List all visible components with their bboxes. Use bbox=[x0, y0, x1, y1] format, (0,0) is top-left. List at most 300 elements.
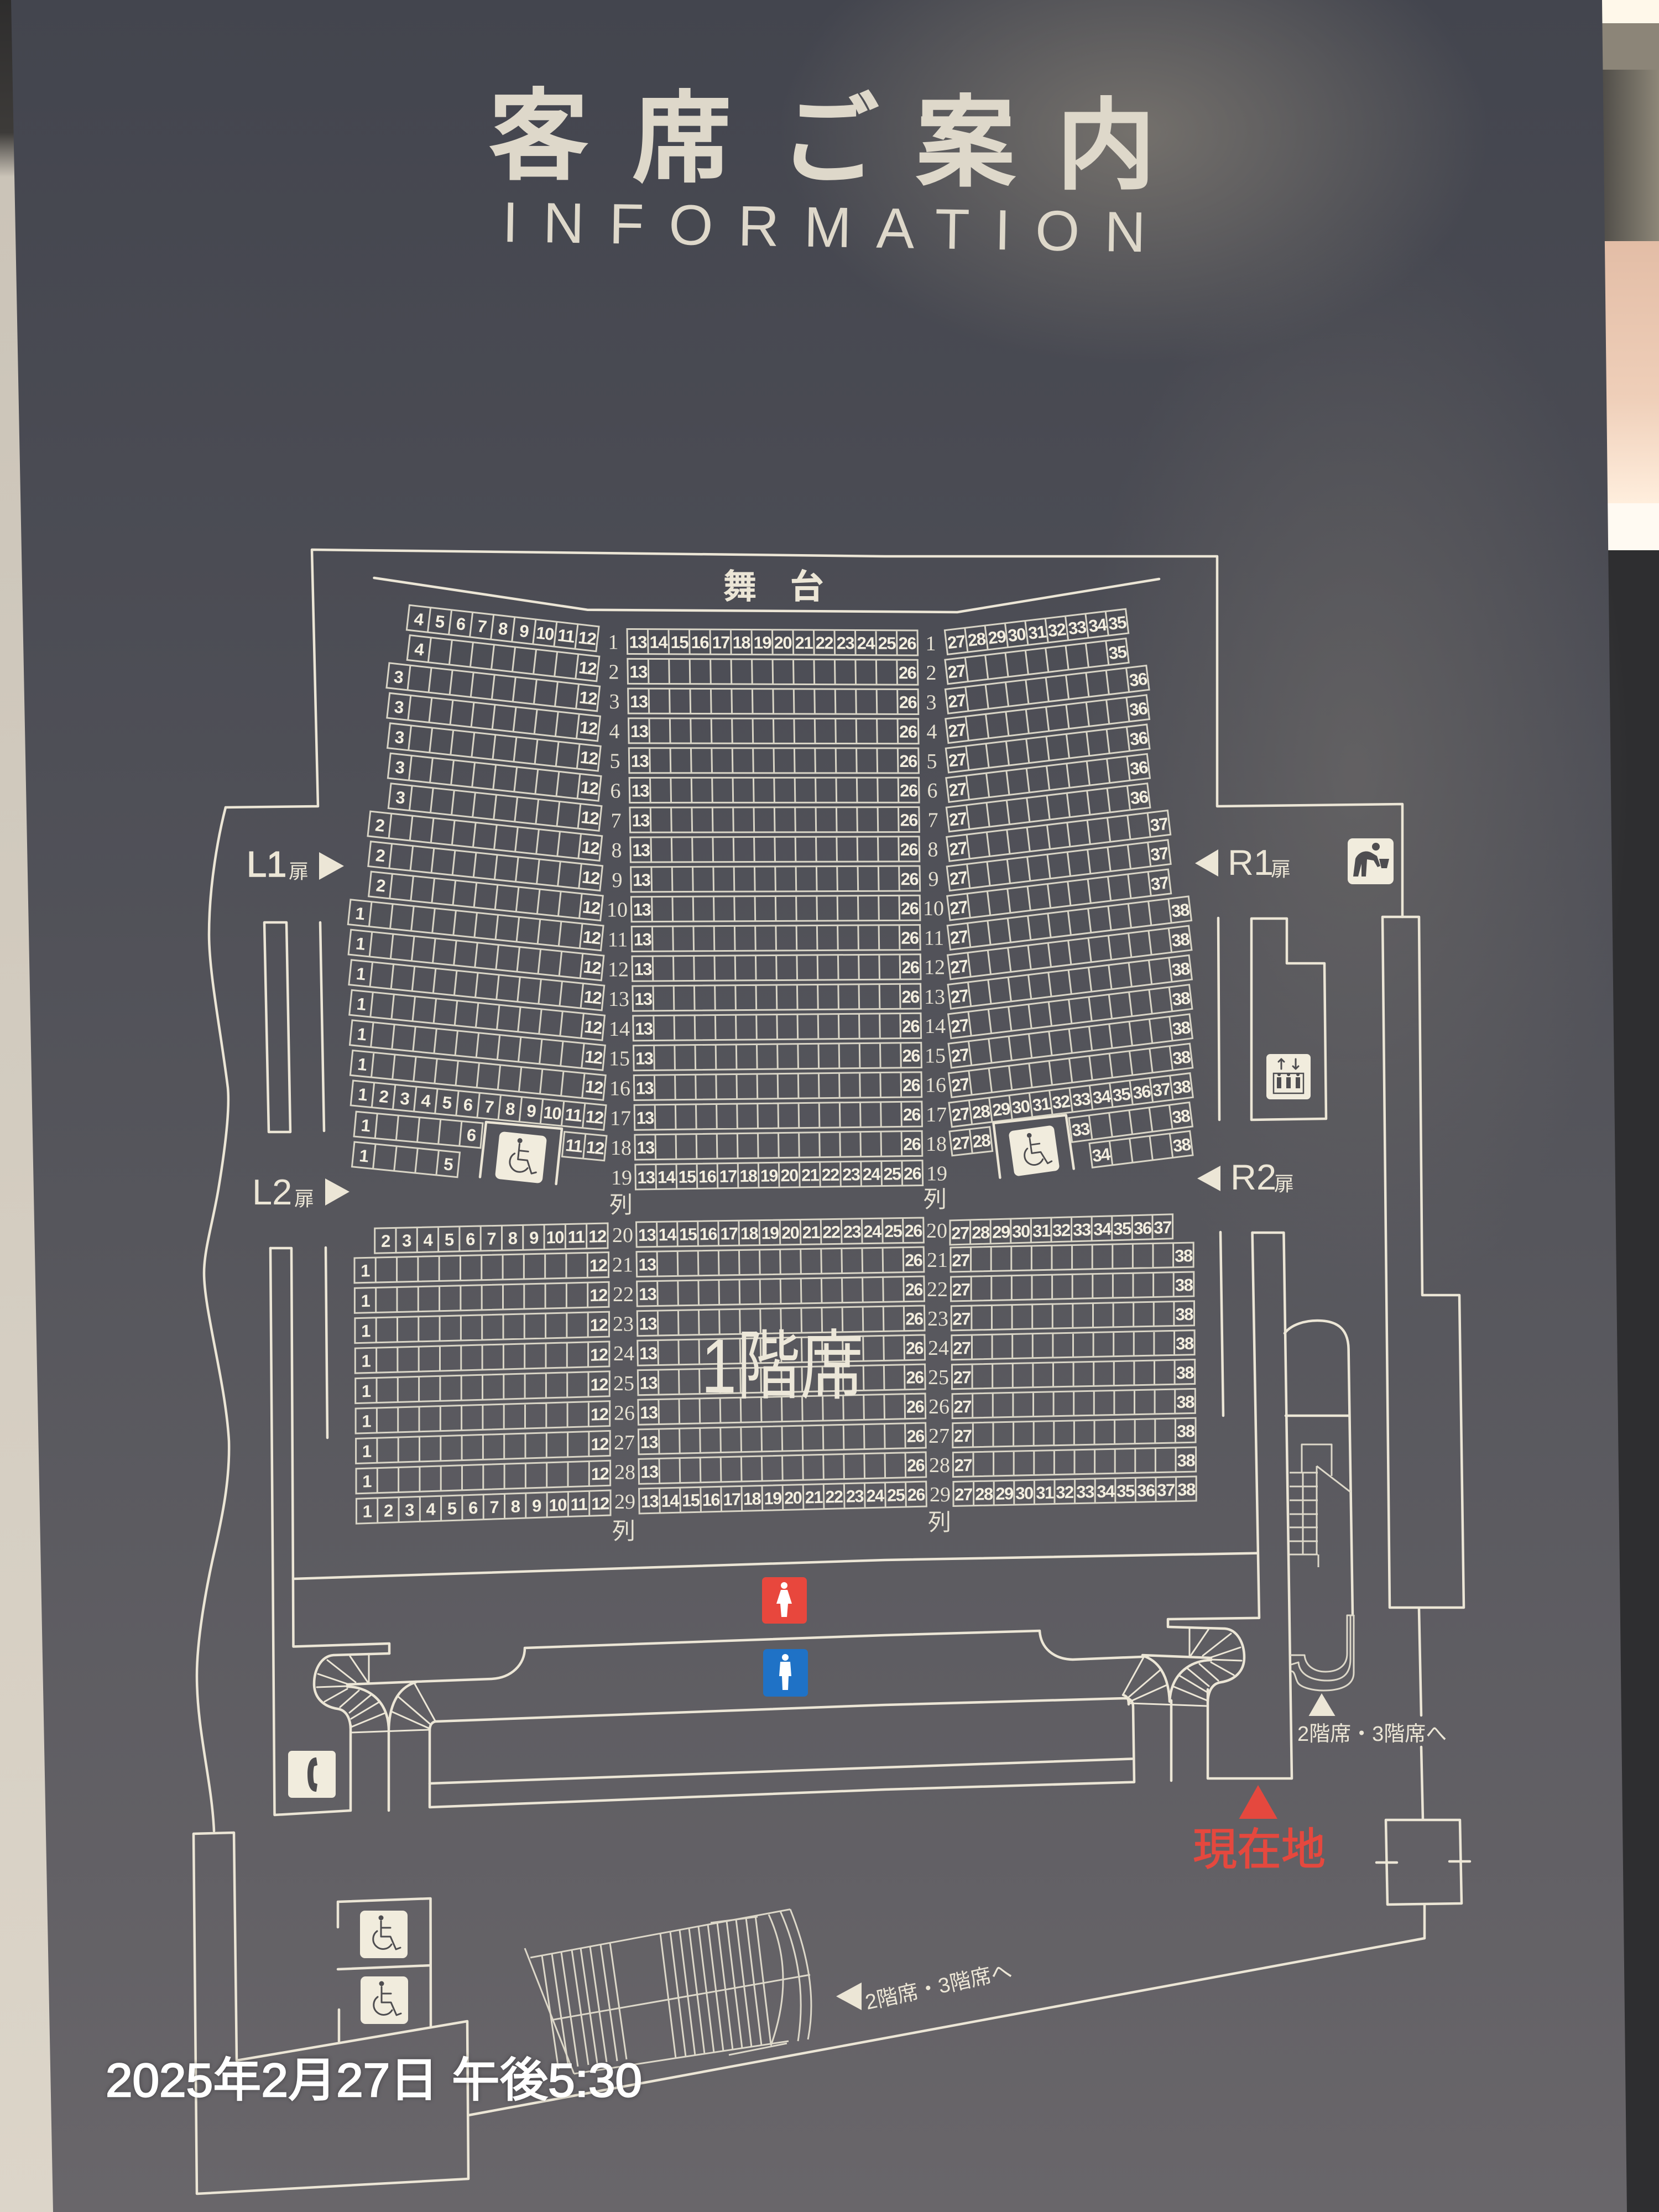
row numbers: right column: 17 bbox=[926, 1103, 947, 1126]
seating block: lower left rows 20-29: 12 bbox=[590, 1315, 607, 1335]
seating block: upper left rows 1-17: 12 bbox=[578, 687, 598, 709]
seating block: upper left rows 1-17: 3 bbox=[394, 757, 406, 778]
seating block: upper right rows 1-17: 27 bbox=[950, 1045, 970, 1066]
row numbers: left column: 3 bbox=[609, 690, 619, 713]
seating block: centre rows 1-29: 26 bbox=[903, 1105, 921, 1124]
seating block: centre rows 1-29: 13 bbox=[630, 692, 648, 711]
row numbers: right column: 列 bbox=[924, 1186, 947, 1212]
seating block: upper left rows 1-17: 10 bbox=[542, 1103, 562, 1124]
seating block: upper right rows 1-17: 38 bbox=[1171, 1106, 1191, 1127]
row numbers: right column: 19 bbox=[926, 1162, 947, 1186]
seating block: lower right rows 20-29: 35 bbox=[1117, 1481, 1135, 1501]
row numbers: left column: 列 bbox=[609, 1192, 633, 1218]
seating block: centre rows 1-29: 13 bbox=[636, 1108, 654, 1128]
seating block: lower left rows 20-29: 12 bbox=[591, 1434, 608, 1454]
seating block: lower left rows 20-29: 5 bbox=[445, 1230, 454, 1249]
door label L1: L1 bbox=[247, 844, 286, 884]
seating block: upper left rows 1-17: 1 bbox=[356, 1024, 367, 1045]
seating block: lower left rows 20-29: 1 bbox=[361, 1291, 371, 1311]
stage label: 舞台 bbox=[723, 568, 824, 606]
seating block: upper left rows 1-17: 6 bbox=[462, 1095, 474, 1115]
seating block: upper left rows 1-17: 12 bbox=[585, 1138, 604, 1159]
seating block: centre rows 1-29: 26 bbox=[901, 869, 919, 889]
seating block: upper right rows 1-17: 27 bbox=[950, 985, 969, 1007]
seating block: upper left rows 1-17: 12 bbox=[578, 717, 598, 739]
seating block: upper right rows 1-17: 32 bbox=[1051, 1092, 1071, 1113]
row numbers: left column: 4 bbox=[609, 720, 619, 743]
seating block: lower left rows 20-29: 7 bbox=[487, 1229, 495, 1249]
seating block: centre rows 1-29: 24 bbox=[866, 1486, 884, 1506]
seating block: lower right rows 20-29: 35 bbox=[1113, 1219, 1131, 1239]
seating block: centre rows 1-29: 18 bbox=[740, 1223, 759, 1243]
row numbers: right column: 8 bbox=[928, 838, 938, 862]
seating block: upper left rows 1-17: 12 bbox=[585, 1107, 604, 1128]
seating block: upper right rows 1-17: 27 bbox=[946, 632, 966, 653]
seating block: lower left rows 20-29: 1 bbox=[362, 1442, 372, 1461]
seating block: upper left rows 1-17: 12 bbox=[582, 927, 601, 948]
seating block: upper right rows 1-17: 33 bbox=[1071, 1119, 1091, 1140]
seating block: upper left rows 1-17: 12 bbox=[581, 837, 600, 858]
seating block: lower right rows 20-29: 27 bbox=[953, 1309, 970, 1329]
right spiral staircase bbox=[1123, 1627, 1244, 1706]
seating block: upper left rows 1-17: 4 bbox=[420, 1091, 432, 1111]
seating block: upper right rows 1-17: 27 bbox=[948, 779, 967, 800]
seating block: centre rows 1-29: 17 bbox=[712, 633, 730, 652]
seating block: centre rows 1-29: 21 bbox=[805, 1488, 823, 1507]
seating block: upper right rows 1-17: 34 bbox=[1088, 614, 1108, 636]
background: left marble wall bbox=[0, 0, 72, 2212]
seating block: lower right rows 20-29: 27 bbox=[952, 1280, 970, 1300]
seating block: centre rows 1-29: 26 bbox=[898, 634, 917, 653]
seating block: lower left rows 20-29: 1 bbox=[362, 1411, 371, 1431]
seating block: lower right rows 20-29: 29 bbox=[995, 1484, 1014, 1504]
row numbers: left column: 8 bbox=[612, 839, 622, 862]
seating block: centre rows 1-29: 13 bbox=[640, 1432, 659, 1452]
seating block: upper right rows 1-17: 27 bbox=[947, 749, 967, 771]
seating block: lower left rows 20-29: 10 bbox=[546, 1228, 564, 1247]
seating block: centre rows 1-29: 13 bbox=[629, 662, 648, 681]
seating block: upper left rows 1-17: 1 bbox=[360, 1115, 371, 1136]
row numbers: left column: 24 bbox=[613, 1342, 634, 1365]
seating block: upper right rows 1-17: 30 bbox=[1007, 624, 1026, 645]
seating block: lower left rows 20-29: 1 bbox=[361, 1321, 371, 1340]
seating block: centre rows 1-29: 26 bbox=[906, 1338, 924, 1358]
seating block: upper left rows 1-17: 8 bbox=[505, 1099, 516, 1119]
seating block: upper right rows 1-17: 27 bbox=[947, 661, 966, 682]
row numbers: left column: 25 bbox=[613, 1372, 634, 1395]
seating block: centre rows 1-29: 13 bbox=[632, 841, 650, 860]
seating block: upper right rows 1-17: 30 bbox=[1011, 1097, 1031, 1118]
seating block: centre rows 1-29: 26 bbox=[905, 1309, 924, 1329]
seating block: lower right rows 20-29: 29 bbox=[992, 1222, 1010, 1242]
seating block: lower left rows 20-29: 11 bbox=[568, 1227, 585, 1247]
background: right column bbox=[1582, 0, 1659, 2212]
row numbers: left column: 12 bbox=[608, 958, 629, 981]
seating block: lower left rows 20-29: 8 bbox=[511, 1496, 520, 1516]
seating block: upper left rows 1-17: 10 bbox=[535, 623, 555, 644]
seating block: centre rows 1-29: 24 bbox=[863, 1222, 881, 1241]
seating block: centre rows 1-29: 13 bbox=[636, 1078, 654, 1098]
seating block: lower left rows 20-29: 12 bbox=[591, 1375, 608, 1395]
lobby wide staircase bbox=[525, 1910, 811, 2074]
seating block: upper left rows 1-17: 11 bbox=[565, 1135, 583, 1156]
photo timestamp: 2025年2月27日 午後5:30 bbox=[106, 2054, 642, 2107]
seating block: centre rows 1-29: 25 bbox=[878, 634, 896, 653]
seating block: lower left rows 20-29: 4 bbox=[426, 1499, 436, 1519]
seating block: centre rows 1-29: 23 bbox=[843, 1222, 862, 1241]
seating block: centre rows 1-29: 26 bbox=[906, 1368, 924, 1387]
seating block: lower left rows 20-29: 3 bbox=[405, 1500, 414, 1520]
seating block: centre rows 1-29: 16 bbox=[700, 1224, 718, 1244]
seating block: upper left rows 1-17: 3 bbox=[393, 697, 405, 717]
row numbers: left column: 26 bbox=[614, 1401, 635, 1425]
row numbers: right column: 20 bbox=[926, 1219, 947, 1243]
row numbers: right column: 24 bbox=[928, 1337, 949, 1360]
row numbers: left column: 列 bbox=[612, 1518, 635, 1544]
seating block: centre rows 1-29: 21 bbox=[801, 1165, 820, 1185]
seating block: lower left rows 20-29: 1 bbox=[363, 1501, 372, 1521]
seating block: upper right rows 1-17: 33 bbox=[1067, 617, 1087, 638]
seating block: upper right rows 1-17: 38 bbox=[1171, 929, 1191, 951]
seating block: lower left rows 20-29: 2 bbox=[381, 1232, 390, 1251]
seating block: upper right rows 1-17: 28 bbox=[971, 1101, 991, 1123]
seating block: lower right rows 20-29: 38 bbox=[1176, 1392, 1194, 1412]
seating block: lower right rows 20-29: 36 bbox=[1134, 1218, 1152, 1238]
seating block: lower left rows 20-29: 6 bbox=[466, 1229, 475, 1249]
seating block: upper left rows 1-17: 1 bbox=[355, 933, 366, 954]
seating block: centre rows 1-29: 23 bbox=[846, 1486, 864, 1506]
seating block: upper left rows 1-17: 12 bbox=[584, 1047, 603, 1068]
row numbers: left column bbox=[607, 630, 635, 1544]
seating block: lower right rows 20-29 bbox=[950, 1214, 1196, 1506]
seating block: upper left rows 1-17: 12 bbox=[578, 658, 597, 679]
seating block: upper right rows 1-17: 36 bbox=[1129, 757, 1149, 779]
seating block: centre rows 1-29: 13 bbox=[634, 989, 653, 1009]
row numbers: left column: 10 bbox=[607, 899, 628, 922]
seating block: centre rows 1-29: 13 bbox=[638, 1225, 656, 1245]
seating block: lower left rows 20-29: 3 bbox=[402, 1231, 411, 1250]
seating block: centre rows 1-29: 13 bbox=[640, 1373, 658, 1393]
seating block: lower right rows 20-29: 27 bbox=[954, 1485, 972, 1504]
seating block: upper left rows 1-17: 6 bbox=[455, 614, 467, 634]
seating block: upper right rows 1-17 bbox=[945, 609, 1193, 1167]
seating block: centre rows 1-29: 26 bbox=[899, 663, 917, 682]
seating block: centre rows 1-29: 26 bbox=[900, 781, 918, 800]
door label L2: L2 bbox=[252, 1172, 292, 1212]
seating block: centre rows 1-29: 26 bbox=[904, 1221, 922, 1241]
seating block: centre rows 1-29: 13 bbox=[634, 959, 652, 979]
seating block: centre rows 1-29: 13 bbox=[637, 1167, 655, 1187]
seating block: upper left rows 1-17: 9 bbox=[526, 1101, 537, 1121]
seating block: lower right rows 20-29: 36 bbox=[1137, 1481, 1155, 1500]
seating block: upper right rows 1-17: 38 bbox=[1171, 1018, 1192, 1039]
seating block: centre rows 1-29: 13 bbox=[634, 930, 652, 950]
seating block: upper right rows 1-17: 31 bbox=[1031, 1094, 1052, 1115]
seating block: lower right rows 20-29: 27 bbox=[953, 1368, 971, 1387]
seating block: lower right rows 20-29: 27 bbox=[954, 1426, 972, 1446]
seating block: centre rows 1-29: 19 bbox=[764, 1488, 781, 1508]
seating block: upper right rows 1-17: 36 bbox=[1129, 787, 1150, 808]
seating block: lower right rows 20-29: 27 bbox=[954, 1455, 972, 1475]
seating block: upper left rows 1-17: 2 bbox=[374, 815, 385, 836]
seating block: lower left rows 20-29: 4 bbox=[424, 1230, 434, 1250]
seating block: lower left rows 20-29: 9 bbox=[529, 1228, 539, 1248]
seating block: lower left rows 20-29: 12 bbox=[589, 1285, 607, 1305]
row numbers: right column: 21 bbox=[927, 1249, 948, 1272]
row numbers: right column: 22 bbox=[927, 1278, 948, 1301]
seating block: upper left rows 1-17: 3 bbox=[393, 667, 404, 687]
seating block: lower right rows 20-29: 37 bbox=[1157, 1480, 1175, 1500]
seating block: lower left rows 20-29: 5 bbox=[447, 1499, 457, 1519]
door label L1 bbox=[247, 844, 344, 884]
seating block: upper right rows 1-17: 27 bbox=[950, 956, 969, 978]
seating block: centre rows 1-29: 26 bbox=[900, 840, 919, 859]
row numbers: right column: 5 bbox=[927, 750, 937, 773]
seating block: lower right rows 20-29: 27 bbox=[952, 1250, 969, 1270]
row numbers: left column: 11 bbox=[608, 928, 628, 951]
seating block: lower left rows 20-29: 7 bbox=[489, 1498, 498, 1517]
seating block: lower left rows 20-29: 12 bbox=[591, 1464, 609, 1484]
seating block: upper left rows 1-17: 5 bbox=[441, 1093, 453, 1113]
door label L1: 扉 bbox=[289, 860, 309, 883]
seating block: centre rows 1-29: 21 bbox=[795, 633, 813, 653]
row numbers: left column: 28 bbox=[614, 1460, 635, 1484]
seating block: centre rows 1-29: 26 bbox=[907, 1485, 925, 1505]
icon: wheelchair lobby lower bbox=[361, 1976, 408, 2024]
seating block: centre rows 1-29: 26 bbox=[906, 1397, 925, 1417]
seating block: upper left rows 1-17: 3 bbox=[394, 727, 405, 748]
seating block: upper left rows 1-17: 4 bbox=[413, 609, 425, 629]
seating block: upper right rows 1-17: 37 bbox=[1150, 873, 1170, 894]
icon: women's toilet bbox=[762, 1577, 807, 1624]
row numbers: right column: 2 bbox=[926, 661, 937, 685]
seating block: centre rows 1-29: 18 bbox=[743, 1489, 761, 1509]
seating block: centre rows 1-29: 26 bbox=[899, 752, 917, 771]
seating block: lower left rows 20-29: 12 bbox=[591, 1494, 609, 1514]
seating block: upper right rows 1-17: 36 bbox=[1128, 698, 1149, 720]
seating block: lower right rows 20-29: 31 bbox=[1036, 1483, 1054, 1503]
row numbers: left column: 2 bbox=[608, 660, 619, 684]
seating block: lower left rows 20-29: 1 bbox=[362, 1351, 371, 1371]
seating block: upper right rows 1-17: 37 bbox=[1151, 1079, 1171, 1100]
seating block: lower left rows 20-29 bbox=[354, 1223, 611, 1524]
door label L2 bbox=[252, 1172, 349, 1212]
seating block: upper right rows 1-17: 27 bbox=[947, 720, 967, 741]
seating block: centre rows 1-29: 26 bbox=[904, 1164, 922, 1183]
row numbers: right column: 15 bbox=[925, 1044, 946, 1067]
row numbers: left column: 21 bbox=[612, 1254, 633, 1277]
seating block: centre rows 1-29: 18 bbox=[732, 633, 751, 653]
seating block: upper left rows 1-17: 7 bbox=[476, 616, 487, 637]
seating block: centre rows 1-29: 13 bbox=[633, 870, 651, 890]
seating block: upper left rows 1-17: 9 bbox=[518, 621, 530, 641]
seating block: upper left rows 1-17: 1 bbox=[354, 904, 366, 924]
seating block: centre rows 1-29: 13 bbox=[640, 1402, 658, 1422]
seating block: centre rows 1-29: 13 bbox=[635, 1048, 654, 1068]
seating block: centre rows 1-29: 13 bbox=[629, 633, 648, 652]
title: 客席ご案内 bbox=[489, 81, 1155, 201]
row numbers: left column: 14 bbox=[609, 1018, 630, 1041]
seating block: centre rows 1-29: 15 bbox=[678, 1167, 696, 1187]
seating block: lower right rows 20-29: 30 bbox=[1015, 1483, 1033, 1503]
seating block: upper left rows 1-17: 4 bbox=[414, 639, 426, 660]
seating block: upper left rows 1-17: 12 bbox=[579, 748, 599, 769]
seating block: centre rows 1-29: 26 bbox=[899, 692, 917, 712]
seating block: lower right rows 20-29: 38 bbox=[1177, 1480, 1196, 1500]
row numbers: right column: 4 bbox=[927, 721, 937, 744]
row numbers: left column: 18 bbox=[611, 1136, 632, 1160]
seating block: centre rows 1-29: 26 bbox=[903, 1134, 921, 1154]
seating block: upper right rows 1-17: 36 bbox=[1129, 728, 1149, 749]
seating block: lower left rows 20-29: 1 bbox=[362, 1381, 371, 1401]
row numbers: right column: 6 bbox=[927, 779, 938, 802]
seating block: lower right rows 20-29: 27 bbox=[951, 1223, 969, 1243]
row numbers: right column: 28 bbox=[929, 1454, 950, 1477]
seating block: upper right rows 1-17: 36 bbox=[1128, 669, 1149, 690]
row numbers: left column: 13 bbox=[608, 988, 629, 1011]
seating block: upper left rows 1-17: 12 bbox=[580, 807, 599, 828]
row numbers: right column: 列 bbox=[928, 1509, 951, 1535]
seating block: centre rows 1-29: 26 bbox=[902, 1046, 920, 1066]
row numbers: right column bbox=[923, 632, 951, 1535]
row numbers: right column: 12 bbox=[924, 956, 945, 979]
seating block: lower right rows 20-29: 38 bbox=[1177, 1451, 1195, 1470]
seating block: centre rows 1-29: 13 bbox=[637, 1138, 655, 1157]
seating block: upper right rows 1-17: 35 bbox=[1112, 1084, 1132, 1105]
seating block: centre rows 1-29: 25 bbox=[883, 1164, 901, 1184]
seating block: upper right rows 1-17: 35 bbox=[1108, 642, 1128, 663]
seating block: lower right rows 20-29: 27 bbox=[953, 1338, 971, 1358]
seating block: upper right rows 1-17: 31 bbox=[1027, 622, 1047, 643]
seating block: upper right rows 1-17: 27 bbox=[951, 1104, 971, 1125]
seating block: centre rows 1-29: 26 bbox=[905, 1280, 924, 1300]
seating block: upper left rows 1-17: 5 bbox=[443, 1154, 454, 1175]
seating block: upper right rows 1-17: 34 bbox=[1092, 1086, 1113, 1108]
seating block: upper left rows 1-17: 6 bbox=[466, 1125, 477, 1145]
seating block: upper left rows 1-17: 8 bbox=[497, 619, 509, 639]
seating block: centre rows 1-29: 26 bbox=[906, 1426, 925, 1446]
seating block: centre rows 1-29: 13 bbox=[632, 811, 650, 830]
seating block: centre rows 1-29: 24 bbox=[863, 1164, 881, 1184]
icon: elevator bbox=[1266, 1054, 1311, 1099]
seating block: lower right rows 20-29: 28 bbox=[975, 1484, 993, 1504]
row numbers: left column: 9 bbox=[612, 869, 623, 892]
seating block: upper left rows 1-17: 1 bbox=[355, 964, 367, 984]
seating block: centre rows 1-29: 13 bbox=[630, 722, 649, 741]
seating block: centre rows 1-29: 13 bbox=[635, 1019, 653, 1039]
seating block: upper right rows 1-17: 28 bbox=[972, 1130, 992, 1151]
wheelchair bay right bbox=[993, 1115, 1074, 1178]
left spiral staircase bbox=[314, 1653, 435, 1733]
current location marker bbox=[1193, 1785, 1326, 1874]
seating block: lower right rows 20-29: 38 bbox=[1176, 1363, 1194, 1383]
seating block: centre rows 1-29: 13 bbox=[640, 1462, 659, 1481]
seating block: centre rows 1-29: 15 bbox=[679, 1224, 697, 1244]
row numbers: right column: 16 bbox=[925, 1074, 946, 1097]
seating block: centre rows 1-29: 20 bbox=[784, 1488, 802, 1507]
seating block: lower right rows 20-29: 38 bbox=[1176, 1334, 1194, 1353]
seating block: lower right rows 20-29: 32 bbox=[1056, 1483, 1073, 1502]
seating block: lower right rows 20-29: 31 bbox=[1032, 1221, 1051, 1241]
seating block: upper left rows 1-17: 2 bbox=[375, 846, 385, 865]
seating block: lower left rows 20-29: 12 bbox=[588, 1227, 606, 1246]
seating block: centre rows 1-29: 23 bbox=[842, 1165, 860, 1185]
door label R2 bbox=[1197, 1157, 1294, 1197]
row numbers: left column: 16 bbox=[609, 1077, 630, 1100]
seating block: centre rows 1-29: 19 bbox=[753, 633, 772, 653]
row numbers: left column: 15 bbox=[609, 1047, 630, 1071]
row numbers: left column: 7 bbox=[611, 809, 622, 832]
seating block: lower right rows 20-29: 27 bbox=[953, 1397, 971, 1417]
seating block: upper right rows 1-17: 38 bbox=[1171, 1047, 1192, 1068]
row numbers: right column: 23 bbox=[927, 1307, 948, 1331]
seating block: centre rows 1-29: 15 bbox=[682, 1490, 700, 1510]
row numbers: right column: 26 bbox=[928, 1395, 950, 1418]
seating block: upper left rows 1-17: 12 bbox=[580, 778, 599, 799]
seating block: lower right rows 20-29: 30 bbox=[1012, 1222, 1030, 1241]
seating block: upper left rows 1-17: 1 bbox=[357, 1084, 368, 1105]
row numbers: left column: 6 bbox=[611, 780, 620, 803]
seating block: upper right rows 1-17: 38 bbox=[1171, 959, 1191, 980]
seating block: lower right rows 20-29: 38 bbox=[1175, 1275, 1193, 1295]
seating block: centre rows 1-29: 14 bbox=[658, 1225, 676, 1244]
seating block: upper left rows 1-17: 12 bbox=[583, 1017, 603, 1038]
seating block: lower left rows 20-29: 12 bbox=[591, 1405, 608, 1425]
seating block: upper left rows 1-17: 1 bbox=[358, 1146, 369, 1166]
seating block: centre rows 1-29: 14 bbox=[658, 1167, 676, 1187]
seating block: centre rows 1-29: 26 bbox=[901, 987, 920, 1006]
seating block: lower right rows 20-29: 33 bbox=[1076, 1482, 1094, 1502]
seating block: centre rows 1-29: 13 bbox=[641, 1491, 659, 1511]
seating block: lower right rows 20-29: 38 bbox=[1175, 1246, 1193, 1266]
seating block: centre rows 1-29: 26 bbox=[907, 1455, 925, 1475]
row numbers: left column: 22 bbox=[613, 1283, 634, 1306]
seating block: lower right rows 20-29: 38 bbox=[1176, 1305, 1193, 1324]
seating block: lower left rows 20-29: 2 bbox=[384, 1501, 393, 1521]
seating block: upper left rows 1-17: 12 bbox=[581, 897, 601, 918]
subtitle: INFORMATION bbox=[502, 190, 1171, 264]
seating block: upper left rows 1-17: 5 bbox=[434, 612, 446, 632]
seating block: upper left rows 1-17: 7 bbox=[483, 1097, 494, 1117]
seating block: lower left rows 20-29: 10 bbox=[549, 1495, 566, 1515]
seating block: lower left rows 20-29: 11 bbox=[571, 1494, 588, 1514]
seating block: lower left rows 20-29: 6 bbox=[468, 1498, 478, 1518]
door label L2: 扉 bbox=[294, 1187, 314, 1210]
row numbers: right column: 29 bbox=[930, 1483, 951, 1506]
seating block: centre rows 1-29: 21 bbox=[802, 1223, 821, 1242]
seating block: upper right rows 1-17: 27 bbox=[948, 808, 968, 830]
seating block: upper right rows 1-17: 28 bbox=[967, 629, 987, 650]
seating block: upper left rows 1-17: 2 bbox=[378, 1087, 389, 1107]
seating block: centre rows 1-29: 22 bbox=[815, 633, 833, 653]
seating block: upper right rows 1-17: 29 bbox=[991, 1099, 1011, 1120]
seating block: upper left rows 1-17: 1 bbox=[356, 994, 367, 1014]
seating block: centre rows 1-29: 13 bbox=[633, 900, 651, 920]
row numbers: right column: 10 bbox=[923, 897, 944, 920]
seating block: centre rows 1-29: 20 bbox=[774, 633, 792, 653]
door label R2: 扉 bbox=[1274, 1172, 1294, 1195]
row numbers: left column: 5 bbox=[609, 750, 620, 773]
seating block: centre rows 1-29: 25 bbox=[887, 1485, 905, 1505]
seating block: lower right rows 20-29: 37 bbox=[1154, 1218, 1171, 1238]
seating block: upper left rows 1-17: 3 bbox=[395, 787, 406, 808]
seating block: upper right rows 1-17: 27 bbox=[950, 1015, 969, 1036]
seating block: lower left rows 20-29: 8 bbox=[508, 1229, 518, 1248]
seating block: centre rows 1-29: 13 bbox=[631, 781, 650, 801]
row numbers: left column: 29 bbox=[614, 1490, 635, 1514]
seating block: upper right rows 1-17: 27 bbox=[948, 838, 968, 859]
seating block: centre rows 1-29: 15 bbox=[670, 633, 689, 652]
